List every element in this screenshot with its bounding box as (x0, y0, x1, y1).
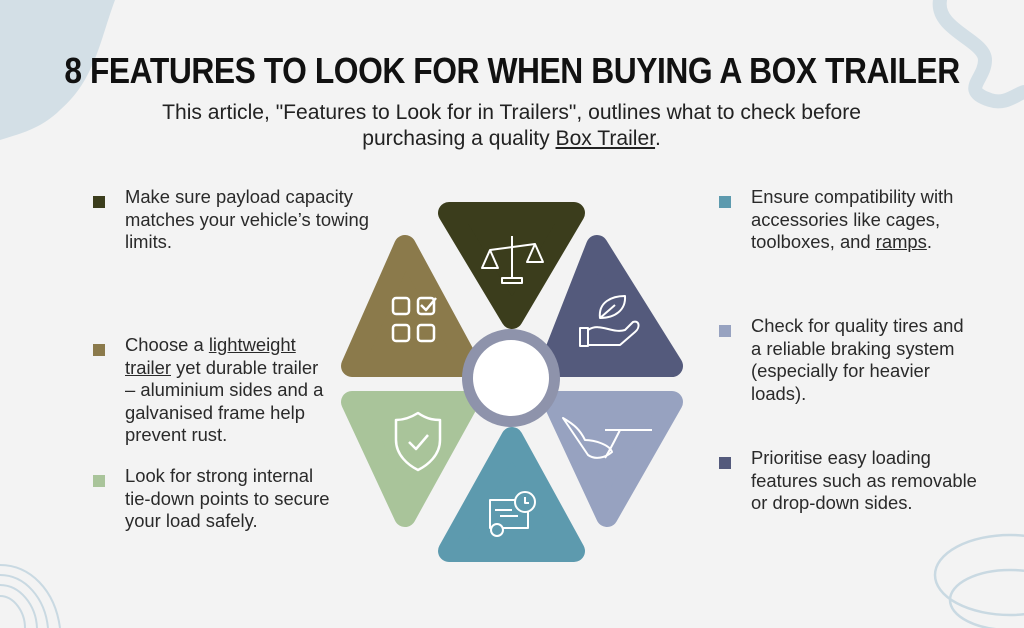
right item 2: loads). (751, 382, 806, 404)
right item 3 (719, 447, 977, 513)
segment: upper right hand leaf (550, 246, 672, 366)
right item 2: (especially for heavier (751, 360, 930, 381)
title: 8 FEATURES TO LOOK FOR WHEN BUYING A BOX TRAILER (64, 50, 960, 91)
right item 3: Prioritise easy loading (751, 447, 931, 468)
right item 2 (719, 315, 964, 404)
segment: bottom chart (449, 438, 574, 551)
left item 2: Choose a lightweight (125, 334, 296, 355)
right item 1: accessories like cages, (751, 208, 940, 230)
left item 2: prevent rust. (125, 424, 227, 445)
subtitle: This article, "Features to Look for in Trailers", outlines what to check before (163, 100, 861, 124)
center ring (462, 329, 560, 427)
left item 3 (93, 465, 329, 531)
segment: top scales (449, 213, 574, 318)
left item 1 (93, 186, 369, 252)
subtitle: purchasing a quality Box Trailer. (363, 126, 661, 150)
left item 3: Look for strong internal (125, 465, 313, 486)
segment: lower right pedal (554, 402, 672, 516)
right item 2: Check for quality tires and (751, 315, 964, 336)
right item 1 (719, 186, 953, 252)
right item 3: or drop-down sides. (751, 492, 913, 513)
segment: lower left shield (352, 402, 468, 516)
left item 1: matches your vehicle’s towing (125, 208, 369, 230)
left item 2: trailer yet durable trailer (125, 356, 318, 378)
right item 2: a reliable braking system (751, 338, 954, 358)
left item 1: Make sure payload capacity (125, 186, 353, 207)
left item 1: limits. (125, 231, 172, 252)
segment: upper left checklist (352, 246, 470, 366)
left item 3: tie-down points to secure (125, 488, 329, 508)
right item 1: toolboxes, and ramps. (751, 231, 932, 252)
left item 3: your load safely. (125, 510, 258, 531)
left item 2 (93, 334, 324, 445)
left item 2: galvanised frame help (125, 402, 305, 422)
left item 2: – aluminium sides and a (125, 379, 323, 400)
right item 1: Ensure compatibility with (751, 186, 953, 207)
right item 3: features such as removable (751, 470, 977, 490)
subtitle (162, 100, 861, 150)
